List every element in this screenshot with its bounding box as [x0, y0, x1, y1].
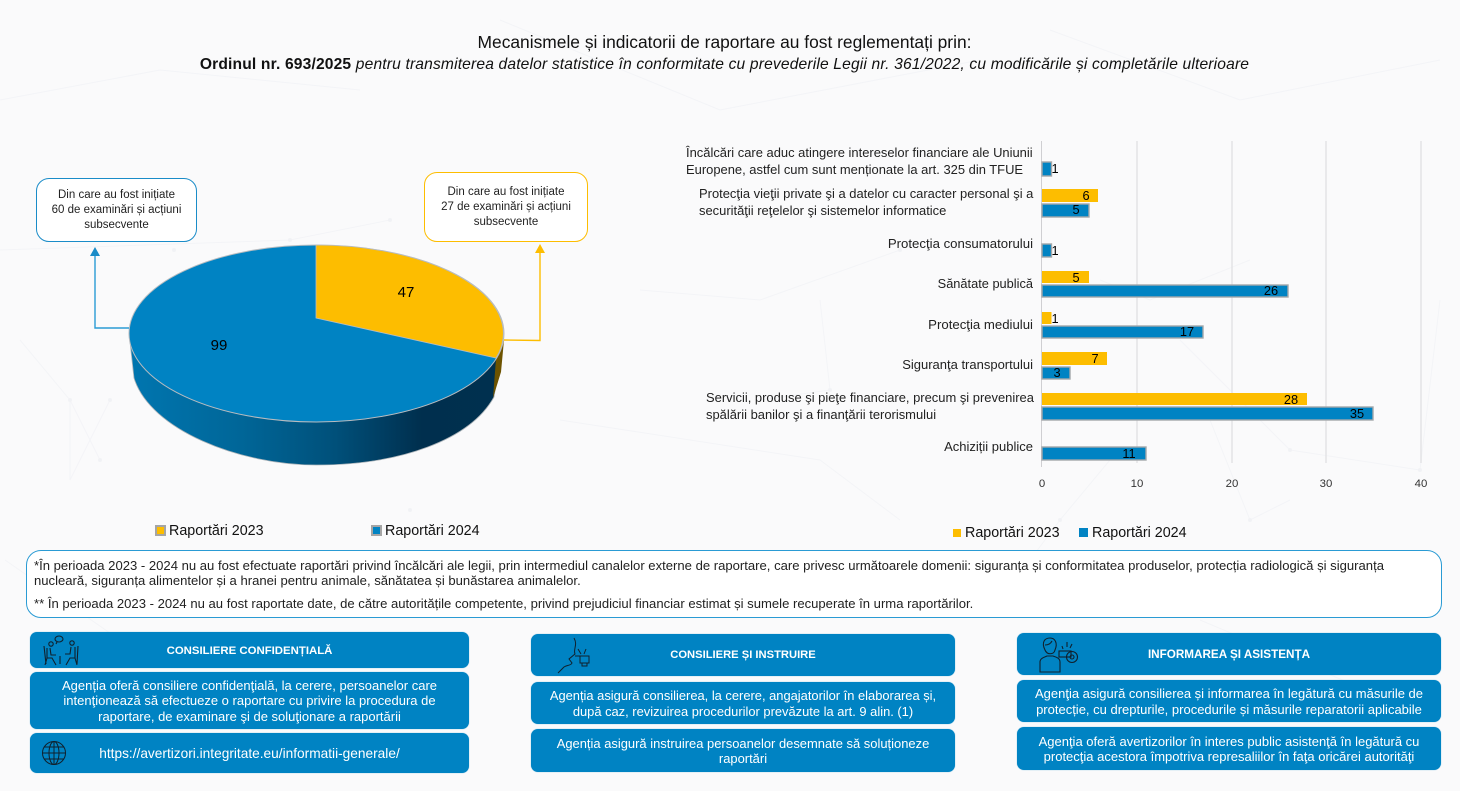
bar values: 28: [1284, 392, 1298, 407]
callout: 60 de examinări: Din care au fost inițiate: [58, 188, 175, 200]
callout: 27 de examinări: 27 de examinări și acțiuni: [441, 200, 571, 212]
category labels: Siguranţa transportului: [902, 357, 1033, 372]
pie yellow side sliver: [493, 340, 504, 398]
x axis labels: 40: [1415, 478, 1427, 490]
text: instruire: Agenția asigură instruirea persoanelor desemnate să soluționeze: [557, 736, 929, 750]
panel: consiliere și instruire: [530, 634, 956, 772]
category labels: Servicii, produse şi pieţe financiare, precum şi prevenirea: [706, 390, 1035, 405]
pie slice: Raportări 2024: [129, 245, 504, 422]
pie slice: Raportări 2023: [316, 245, 503, 358]
heading: informarea și asistența: INFORMAREA ȘI ASISTENȚA: [1148, 648, 1310, 661]
legend swatch 2024: [371, 525, 382, 536]
bar values: 1: [1051, 161, 1059, 176]
bar values: 3: [1053, 365, 1061, 380]
category labels: [685, 145, 1035, 454]
x axis labels: 10: [1131, 478, 1143, 490]
heading: consiliere și instruire: CONSILIERE ȘI INSTRUIRE: [670, 649, 816, 661]
text: consiliere angajatori: [531, 682, 955, 724]
footnotes panel: [26, 550, 1442, 618]
category labels: Protecţia vieţii private şi a datelor cu caracter personal şi a: [699, 186, 1034, 201]
heading: consiliere confidențială: [30, 632, 469, 668]
footnote: domenii fără raportări: [34, 558, 1384, 588]
bars 2023: [1042, 189, 1307, 405]
callout: 60 de examinări: [36, 178, 197, 242]
pie value 99: 99: [211, 337, 227, 354]
text: consiliere și informare: Agenţia asigură consilierea și informarea în legătură cu măsurile de: [1035, 686, 1423, 701]
text: consiliere și informare: protecție, cu drepturile, procedurile și măsurile reparatorii aplicabile: [1036, 702, 1422, 716]
bar values: 26: [1264, 283, 1278, 298]
pie legend: [155, 523, 480, 539]
bar values: 1: [1051, 243, 1059, 258]
title: Ordinul nr. 693/2025 pentru transmiterea datelor statistice în conformitate cu prevederile Legii nr. 361/2022, cu modificările și completările ulterioare: [200, 56, 1249, 73]
footnote: prejudiciu financiar: ** În perioada 2023 - 2024 nu au fost raportate date, de către autoritățile competente, privind prejudiciul financiar estimat și sumele recuperate în urma raportărilor.: [34, 596, 973, 611]
pie side wall: [129, 333, 504, 465]
text: asistență avertizori: protecţia acestora împotriva represaliilor în faţa oricărei autorităţi: [1044, 749, 1414, 764]
category labels: Protecţia mediului: [928, 317, 1033, 332]
text: asistență avertizori: [1017, 727, 1441, 770]
bar chart legend: [953, 525, 1187, 541]
legend label 2024: Raportări 2024: [385, 523, 480, 539]
link bar: [30, 733, 469, 773]
icon: globe: [42, 741, 66, 765]
callout: 60 de examinări: subsecvente: [84, 218, 149, 230]
bar values: 5: [1072, 202, 1080, 217]
category labels: Încălcări care aduc atingere intereselor financiare ale Uniunii: [685, 145, 1033, 160]
panel: informarea și asistența: [1016, 632, 1442, 770]
footnote: domenii fără raportări: nucleară, siguranța alimentelor și a hranei pentru animale, sănătatea și bunăstarea animalelor.: [34, 573, 581, 588]
category labels: Sănătate publică: [938, 276, 1034, 291]
link bar: https://avertizori.integritate.eu/informatii-generale/: [99, 746, 400, 761]
text: consiliere și informare: [1017, 680, 1441, 722]
text: consiliere angajatori: Agenția asigură consilierea, la cerere, angajatorilor în elaborarea și,: [550, 688, 936, 703]
category labels: Achiziții publice: [944, 439, 1033, 454]
callout: 27 de examinări: subsecvente: [474, 216, 538, 228]
text: asistență avertizori: Agenţia oferă avertizorilor în interes public asistenţă în legătură cu: [1039, 734, 1419, 748]
x axis labels: [1039, 478, 1427, 490]
bar legend swatch 2023: [953, 529, 961, 537]
heading: informarea și asistența: [1017, 633, 1441, 675]
title: [200, 32, 1249, 73]
heading: consiliere și instruire: [531, 634, 955, 676]
bar values: 11: [1122, 446, 1136, 461]
bar values: 6: [1082, 188, 1090, 203]
text: consiliere confidențială: Agenția oferă consiliere confidenţială, la cerere, persoanelor care: [62, 678, 437, 693]
legend swatch 2023: [155, 525, 166, 536]
bar legend label 2024: Raportări 2024: [1092, 525, 1187, 541]
bar values: 1: [1051, 311, 1059, 326]
text: consiliere confidențială: raportare, de examinare şi de soluţionare a raportării: [98, 709, 401, 724]
x axis labels: 20: [1226, 478, 1238, 490]
icon: two people talking: [44, 636, 79, 666]
panel: consiliere confidențială: [30, 632, 470, 774]
x axis labels: 30: [1320, 478, 1332, 490]
x axis labels: 0: [1039, 478, 1045, 490]
text: consiliere angajatori: după caz, revizuirea procedurilor prevăzute la art. 9 alin. (1): [573, 704, 913, 718]
heading: consiliere confidențială: CONSILIERE CONFIDENȚIALĂ: [167, 645, 332, 657]
bars 2024: [1042, 162, 1373, 460]
icon: profile speaking: [558, 638, 590, 674]
pie value 47: 47: [398, 284, 414, 301]
bar values: 5: [1072, 270, 1080, 285]
title: Mecanismele și indicatorii de raportare au fost reglementați prin:: [478, 32, 971, 52]
bar values: [1051, 161, 1364, 461]
callout: 27 de examinări: Din care au fost inițiate: [448, 186, 564, 198]
bar values: 7: [1091, 351, 1099, 366]
text: consiliere confidențială: intenţionează să efectueze o raportare cu privire la procedura de: [63, 693, 436, 708]
bar values: 35: [1350, 406, 1364, 421]
category labels: Protecţia consumatorului: [888, 236, 1033, 251]
text: instruire: [531, 729, 955, 772]
bar values: 17: [1180, 324, 1194, 339]
bar legend label 2023: Raportări 2023: [965, 525, 1060, 541]
category labels: securităţii reţelelor şi sistemelor informatice: [699, 203, 946, 218]
icon: person with whistle: [1039, 638, 1078, 672]
text: instruire: raportări: [719, 751, 767, 766]
category labels: Europene, astfel cum sunt menționate la art. 325 din TFUE: [686, 162, 1023, 177]
callout: 60 de examinări: 60 de examinări și acțiuni: [52, 204, 181, 216]
footnote: domenii fără raportări: *În perioada 2023 - 2024 nu au fost efectuate raportări privind încălcări ale legii, prin intermediul canalelor externe de raportare, care privesc următoarele domenii: siguranța și conformitatea produselor, protecția radiologică și siguranța: [34, 558, 1384, 573]
bar legend swatch 2024: [1079, 528, 1088, 537]
legend label 2023: Raportări 2023: [169, 523, 264, 539]
category labels: spălării banilor şi a finanţării terorismului: [706, 407, 936, 422]
callout: 27 de examinări: [424, 172, 588, 242]
text: consiliere confidențială: [30, 672, 469, 729]
